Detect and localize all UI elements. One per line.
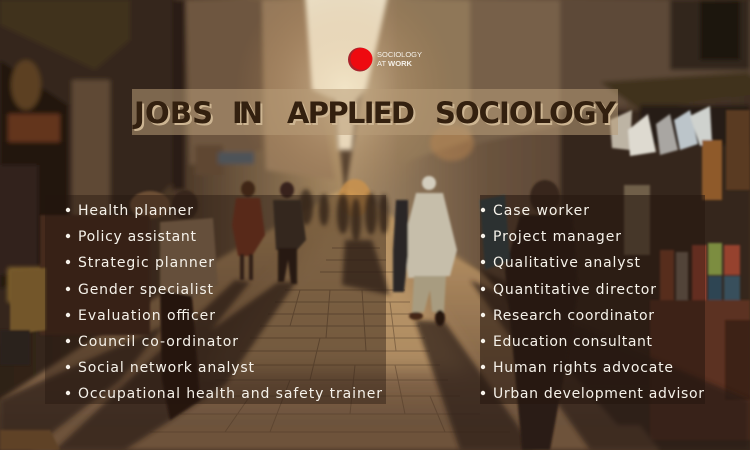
right job list: Project manager (493, 229, 621, 245)
right buildings (345, 0, 750, 400)
right job list: Quantitative director (493, 282, 656, 298)
right job list: Case worker (493, 203, 589, 219)
left job list: Social network analyst (78, 360, 254, 376)
title band (132, 89, 618, 135)
distant figures (299, 189, 389, 242)
title: JOBS (134, 98, 215, 132)
paving stone lines (150, 248, 510, 432)
left buildings (0, 0, 345, 400)
left job list: Occupational health and safety trainer (78, 386, 382, 402)
left job list: Policy assistant (78, 229, 196, 245)
right list backing panel (480, 195, 705, 404)
logo wordmark: AT WORK (377, 61, 412, 68)
person: woman in dark in right panel (530, 180, 560, 214)
right job list (481, 203, 704, 402)
person: left foreground (172, 190, 198, 220)
title: IN (232, 96, 263, 130)
sun haze (235, 0, 455, 205)
person: dark blue clothes (280, 182, 294, 198)
long shadows on ground (0, 240, 750, 450)
right job list: Urban development advisor (493, 386, 704, 402)
right job list: Research coordinator (493, 308, 654, 324)
left job list: Strategic planner (78, 255, 214, 271)
logo wordmark (377, 52, 422, 68)
left job list (66, 203, 382, 402)
logo wordmark: SOCIOLOGY (377, 52, 422, 59)
left job list: Evaluation officer (78, 308, 215, 324)
title: SOCIOLOGY (435, 96, 617, 130)
title: APPLIED (287, 96, 415, 130)
left list backing panel (45, 195, 386, 404)
left job list: Council co-ordinator (78, 334, 238, 350)
goods hanging and stall on right (610, 106, 750, 440)
title (132, 96, 619, 132)
person: child (393, 200, 408, 292)
street ground (0, 192, 660, 450)
title: SOCIOLOGY (437, 98, 619, 132)
right job list: Education consultant (493, 334, 652, 350)
title: IN (234, 98, 265, 132)
person: white kurta (422, 176, 436, 190)
logo (348, 48, 422, 72)
right job list: Human rights advocate (493, 360, 673, 376)
sky glow (305, 0, 388, 150)
street crowd (0, 176, 578, 450)
person: red dress (241, 181, 255, 197)
right job list: Qualitative analyst (493, 255, 640, 271)
title: JOBS (132, 96, 213, 130)
left job list: Gender specialist (78, 282, 214, 298)
icon: red circle logo (348, 48, 372, 72)
title: APPLIED (289, 98, 417, 132)
left job list: Health planner (78, 203, 193, 219)
